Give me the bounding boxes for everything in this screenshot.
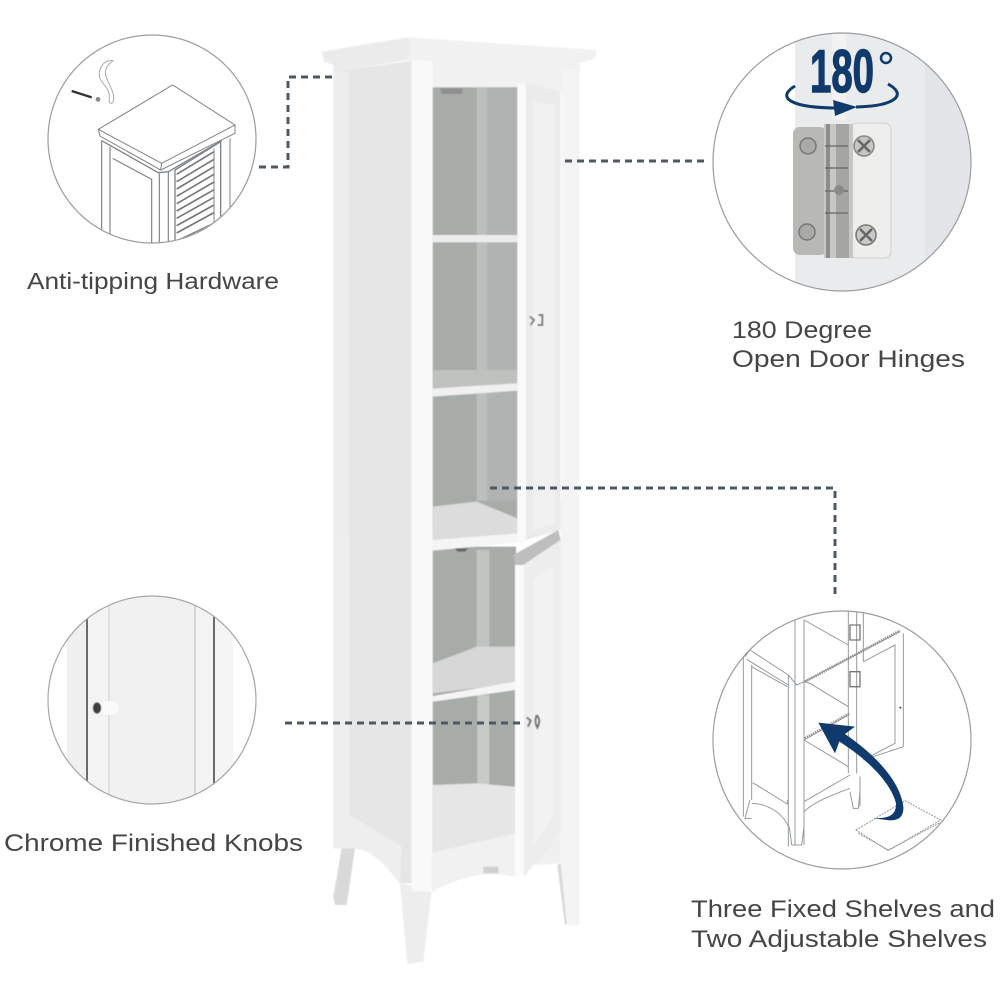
cabinet line art — [743, 612, 903, 847]
callout connector: shelves — [490, 488, 835, 597]
interior — [433, 87, 517, 541]
knob — [530, 315, 542, 325]
label: anti-tipping hardware: Anti-tipping Hardware — [27, 268, 279, 294]
icon: screw — [72, 91, 100, 102]
label: 180 degree open door hinges: 180 Degree — [732, 317, 872, 344]
icon: anti-tipping strap — [99, 61, 114, 103]
knob — [527, 715, 539, 728]
open door — [513, 530, 561, 565]
panel: chrome knob detail circle — [48, 590, 256, 810]
callout connector: door hinges — [565, 160, 705, 162]
icon: curved arrow — [818, 723, 903, 820]
callout connector: knobs — [285, 722, 525, 724]
icon: cabinet top with louvered door — [98, 85, 235, 247]
cabinet upper section — [322, 37, 597, 543]
open door — [517, 83, 526, 543]
label: chrome finished knobs: Chrome Finished Knobs — [4, 830, 303, 857]
removed shelf line art — [856, 801, 941, 851]
label: shelves: Two Adjustable Shelves — [691, 926, 987, 953]
right stile and leg — [557, 500, 579, 925]
panel: anti-tipping hardware detail circle — [48, 35, 256, 247]
label: 180 degree open door hinges: Open Door Hinges — [732, 346, 965, 373]
label: shelves: Three Fixed Shelves and — [691, 896, 995, 923]
icon: hinge — [793, 123, 891, 258]
cabinet lower section — [333, 500, 579, 964]
crown moulding — [322, 37, 597, 72]
panel: shelves line drawing circle — [713, 611, 971, 869]
icon: rotation arrow — [787, 84, 897, 116]
callout connector: anti-tipping hardware — [259, 77, 332, 167]
product: white linen cabinet — [322, 37, 597, 964]
interior — [433, 547, 516, 855]
label: shelves — [691, 896, 995, 953]
panel: 180 degree hinge detail circle — [713, 30, 980, 300]
label: 180 degree open door hinges — [732, 317, 965, 373]
label: 180 degree: 180 — [810, 38, 874, 105]
icon: knob — [93, 702, 101, 714]
